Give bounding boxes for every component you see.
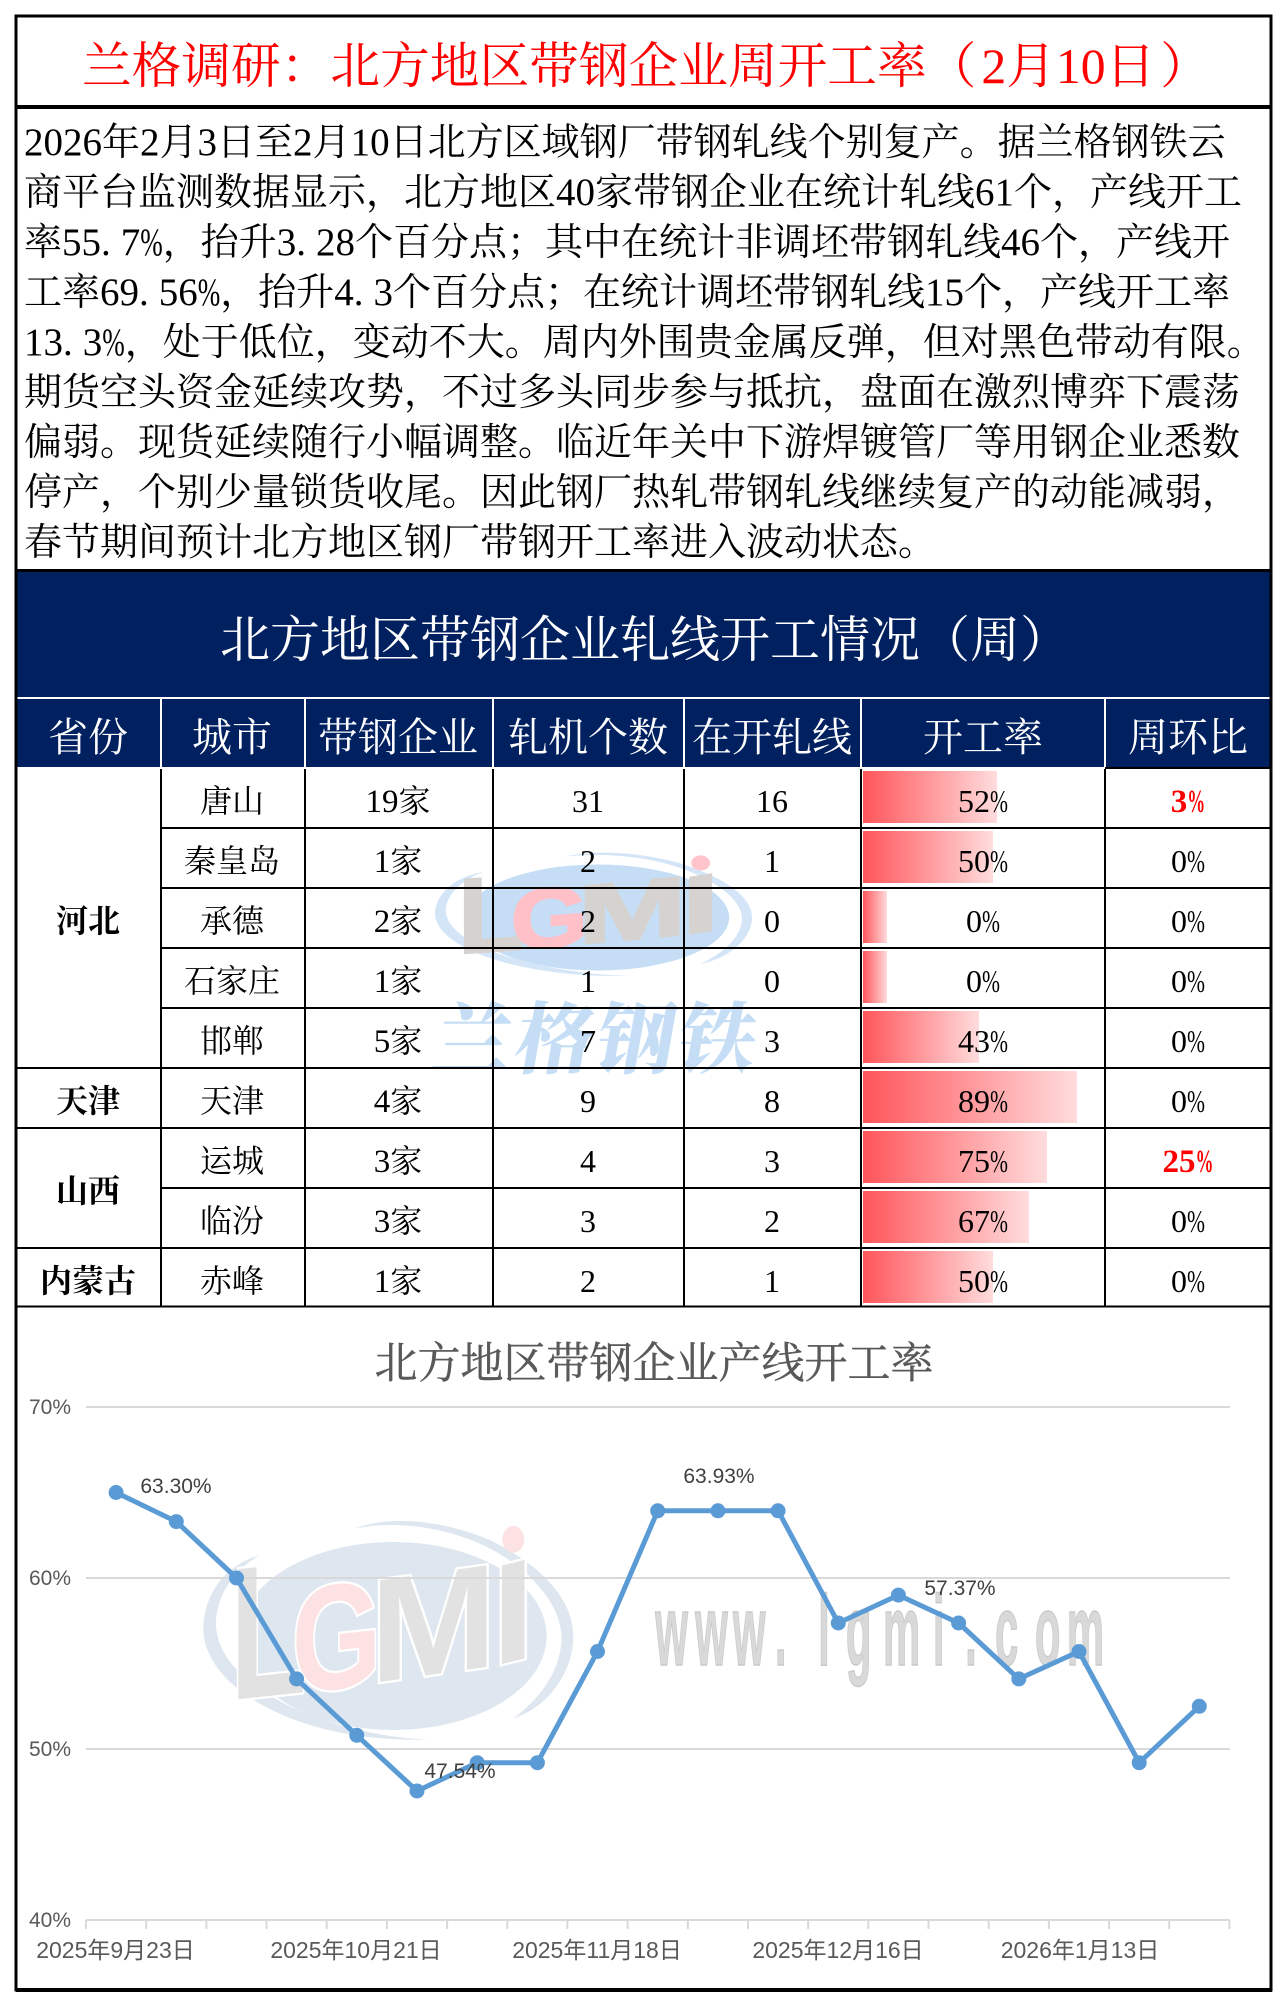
table row: 运城: 3家 xyxy=(374,1143,422,1180)
table grid lines xyxy=(17,768,1270,1306)
table: rate bars xyxy=(863,771,1077,1303)
table row: 赤峰: 0% xyxy=(1171,1263,1205,1299)
text block: weekly summary: 商平台监测数据显示，北方地区40家带钢企业在统计轧线61个，产线开工 xyxy=(24,171,1242,214)
table row: 唐山: 52% xyxy=(958,783,1008,819)
watermark: Chinese brand name: 兰格钢铁 xyxy=(427,999,764,1085)
table row: 邯郸: 3 xyxy=(764,1023,780,1059)
table row: 天津: 89% xyxy=(958,1083,1008,1119)
text block: weekly summary: 13. 3%，处于低位，变动不大。周内外围贵金属反弹，但对黑色带动有限。 xyxy=(24,321,1265,364)
watermark: LGMI logo over table: L xyxy=(458,854,524,977)
table row: 赤峰: 2 xyxy=(580,1263,596,1299)
table row: 秦皇岛: 2 xyxy=(580,843,596,879)
chart: data labels: 63.30% xyxy=(140,1475,212,1498)
watermark: LGMI logo behind chart: L xyxy=(230,1521,307,1741)
table body: province column xyxy=(40,903,136,1299)
chart: y axis labels xyxy=(29,1396,71,1932)
table row: 天津 xyxy=(200,1083,1205,1120)
table row: 天津: 8 xyxy=(764,1083,780,1119)
chart: utilisation line with markers xyxy=(109,1485,1207,1798)
chart: x axis labels xyxy=(36,1937,1159,1963)
table row: 邯郸: 0% xyxy=(1171,1023,1205,1059)
table row: 承德: 0% xyxy=(1171,903,1205,939)
table row: 邯郸 xyxy=(200,1023,1205,1060)
table row: 邯郸: 7 xyxy=(580,1023,596,1059)
table header row: 轧机个数 xyxy=(508,715,668,760)
table row: 运城 xyxy=(200,1143,1214,1180)
text block: weekly summary: 期货空头资金延续攻势，不过多头同步参与抵抗，盘面在激烈博弈下震荡 xyxy=(24,372,1240,414)
table row: 秦皇岛: 1 xyxy=(764,843,780,879)
table row: 唐山 xyxy=(200,783,1205,820)
table row: 赤峰: 1家 xyxy=(374,1263,422,1300)
table row: 邯郸: 43% xyxy=(958,1023,1008,1059)
table row: 临汾 xyxy=(200,1203,1205,1240)
table row: 临汾: 3 xyxy=(580,1203,596,1239)
table row: 天津: 0% xyxy=(1171,1083,1205,1119)
table row: 承德: 0% xyxy=(966,903,1000,939)
table row: 承德 xyxy=(200,903,1205,940)
table row: 石家庄: 0% xyxy=(1171,963,1205,999)
table row: 承德: 2 xyxy=(580,903,596,939)
watermark: LGMI logo over table: M xyxy=(578,859,686,962)
table row: 石家庄: 0% xyxy=(966,963,1000,999)
chart: x axis labels: 2026年1月13日 xyxy=(1001,1937,1159,1963)
watermark: LGMI logo behind chart xyxy=(203,1521,573,1741)
chart title: 北方地区带钢企业产线开工率 xyxy=(374,1340,934,1388)
chart: data labels: 57.37% xyxy=(924,1577,996,1600)
text block: weekly summary: 2026年2月3日至2月10日北方区域钢厂带钢轧线个别复产。据兰格钢铁云 xyxy=(24,121,1226,164)
table row: 临汾: 0% xyxy=(1171,1203,1205,1239)
table header row xyxy=(17,699,1270,767)
table row: 唐山: 19家 xyxy=(365,783,431,820)
table body: province column: 内蒙古 xyxy=(40,1263,136,1299)
table row: 承德: 0 xyxy=(764,903,780,939)
watermark: LGMI logo behind chart: M xyxy=(370,1533,497,1715)
chart: y axis labels: 40% xyxy=(29,1909,71,1932)
table banner: section heading: 北方地区带钢企业轧线开工情况（周） xyxy=(220,612,1070,668)
table row: 石家庄: 0 xyxy=(764,963,780,999)
table row: 唐山: 16 xyxy=(756,783,788,819)
table row: 秦皇岛 xyxy=(184,843,1205,880)
table row: 唐山: 31 xyxy=(572,783,604,819)
chart: data labels: 47.54% xyxy=(424,1760,496,1783)
table row: 唐山: 唐山 xyxy=(200,783,264,819)
table row: 临汾: 67% xyxy=(958,1203,1008,1239)
table body: province column: 河北 xyxy=(56,903,120,939)
table row: 承德: 2家 xyxy=(374,903,422,940)
chart: y axis labels: 60% xyxy=(29,1567,71,1590)
table row: 邯郸: 邯郸 xyxy=(200,1023,264,1059)
text block: weekly summary: 停产，个别少量锁货收尾。因此钢厂热轧带钢轧线继续复产的动能减弱， xyxy=(24,472,1240,514)
table header row: 在开轧线 xyxy=(692,715,852,760)
table row: 运城: 75% xyxy=(958,1143,1008,1179)
chart: horizontal grid and x axis xyxy=(86,1407,1230,1929)
table row: 石家庄: 1家 xyxy=(374,963,422,1000)
table row: 运城: 3 xyxy=(764,1143,780,1179)
table row: 天津: 4家 xyxy=(374,1083,422,1120)
watermark: website address: www.lgmi.com xyxy=(655,1576,1104,1687)
text block: weekly summary: 率55. 7%，抬升3. 28个百分点；其中在统计非调坯带钢轧线46个，产线开 xyxy=(24,221,1230,264)
table row: 运城: 25% xyxy=(1162,1144,1214,1180)
table row: 秦皇岛: 秦皇岛 xyxy=(184,843,280,879)
table row: 石家庄 xyxy=(184,963,1205,1000)
chart: x axis labels: 2025年9月23日 xyxy=(36,1937,195,1963)
watermark: LGMI logo behind chart: G xyxy=(292,1548,382,1725)
text block: weekly summary: 工率69. 56%，抬升4. 3个百分点；在统计调坯带钢轧线15个，产线开工率 xyxy=(24,271,1230,314)
table row: 临汾: 3家 xyxy=(374,1203,422,1240)
table row: 石家庄: 1 xyxy=(580,963,596,999)
text block: weekly summary: 偏弱。现货延续随行小幅调整。临近年关中下游焊镀管厂等用钢企业悉数 xyxy=(24,422,1240,464)
watermark: LGMI logo behind chart: I xyxy=(492,1526,535,1697)
chart: data labels: 63.93% xyxy=(683,1465,755,1488)
watermark: LGMI logo over table: I xyxy=(682,856,719,952)
watermark: LGMI logo over table xyxy=(435,853,752,977)
table header row: 带钢企业 xyxy=(318,715,478,760)
text block: weekly summary xyxy=(24,121,1265,564)
table row: 秦皇岛: 1家 xyxy=(374,843,422,880)
table banner: section heading xyxy=(17,572,1270,697)
text block: weekly summary: 春节期间预计北方地区钢厂带钢开工率进入波动状态。 xyxy=(24,522,936,564)
table row: 石家庄: 石家庄 xyxy=(184,963,280,999)
table header row: 城市 xyxy=(192,715,272,760)
title: 兰格调研：北方地区带钢企业周开工率（2月10日） xyxy=(82,39,1210,94)
table header row: 省份 xyxy=(48,715,128,760)
table row: 承德: 承德 xyxy=(200,903,265,939)
table row: 天津: 9 xyxy=(580,1083,596,1119)
table row: 秦皇岛: 0% xyxy=(1171,843,1205,879)
table header row: 开工率 xyxy=(923,715,1043,760)
table body: province column: 山西 xyxy=(56,1173,120,1209)
table row: 唐山: 3% xyxy=(1171,784,1205,820)
chart: x axis labels: 2025年10月21日 xyxy=(270,1937,442,1963)
table row: 赤峰: 50% xyxy=(958,1263,1008,1299)
table row: 临汾: 2 xyxy=(764,1203,780,1239)
table row: 赤峰 xyxy=(200,1263,1205,1300)
table row: 赤峰: 赤峰 xyxy=(200,1263,264,1299)
table row: 运城: 4 xyxy=(580,1143,596,1179)
chart: y axis labels: 50% xyxy=(29,1738,71,1761)
table header row: 周环比 xyxy=(1128,715,1248,760)
chart: x axis labels: 2025年11月18日 xyxy=(512,1937,682,1963)
table row: 赤峰: 1 xyxy=(764,1263,780,1299)
table row: 临汾: 临汾 xyxy=(200,1203,264,1239)
watermark: LGMI logo over table: G xyxy=(511,868,588,968)
chart: y axis labels: 70% xyxy=(29,1396,71,1419)
table row: 邯郸: 5家 xyxy=(374,1023,422,1060)
table row: 运城: 运城 xyxy=(200,1143,264,1179)
chart: data labels xyxy=(140,1465,996,1783)
table row: 天津: 天津 xyxy=(200,1083,264,1119)
table row: 秦皇岛: 50% xyxy=(958,843,1008,879)
chart: x axis labels: 2025年12月16日 xyxy=(752,1937,924,1963)
table body: province column: 天津 xyxy=(56,1083,120,1119)
